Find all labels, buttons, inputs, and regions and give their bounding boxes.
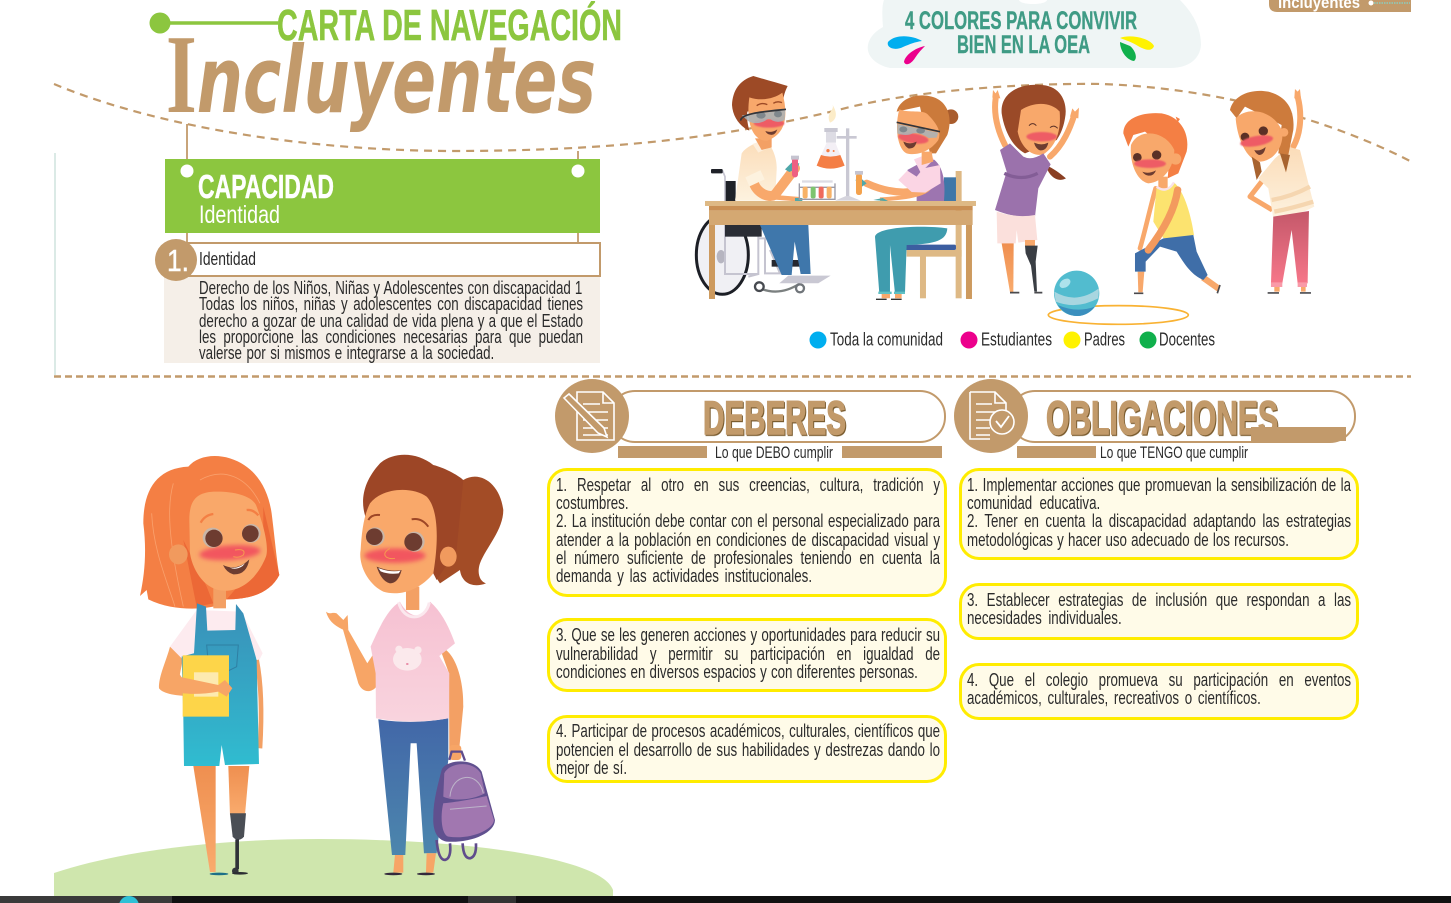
title: Incluyentes: Incluyentes (166, 13, 596, 137)
card: deberes 1 y 2: atender a la población en condiciones de discapacidad visual y (556, 530, 940, 550)
card: obligaciones 1 y 2: comunidad educativa. (967, 493, 1100, 513)
text block: derecho de identidad (199, 278, 583, 363)
deberes subtitle: Lo que DEBO cumplir (715, 443, 833, 462)
number badge (155, 239, 197, 281)
green hill (54, 839, 613, 896)
card: obligaciones 1 y 2: 1. Implementar acciones que promuevan la sensibilización de la (967, 475, 1351, 495)
lab equipment (799, 103, 861, 201)
banner heading: CAPACIDAD (198, 168, 334, 205)
subtitle bars (1017, 427, 1346, 458)
woman (855, 95, 962, 299)
card: obligaciones 4 (959, 663, 1359, 720)
deberes heading: DEBERES (703, 391, 846, 444)
bottom bar (0, 896, 1451, 903)
text block: derecho de identidad: derecho a gozar de una calidad de vida plena y a que el Estado (199, 311, 583, 331)
legend: toda la comunidad (810, 330, 943, 350)
red-haired girl (140, 456, 279, 875)
text block: derecho de identidad: les proporcione las condiciones necesarias para que puedan (199, 327, 583, 347)
card: obligaciones 1 y 2: 2. Tener en cuenta la discapacidad adaptando las estrategias (967, 511, 1351, 531)
icon: document with check (954, 379, 1028, 453)
heading text: CARTA DE NAVEGACIÓN (277, 0, 622, 50)
card: deberes 4: mejor de sí. (556, 758, 627, 778)
legend: toda la comunidad: Toda la comunidad (830, 330, 943, 350)
legend: docentes (1140, 330, 1215, 350)
panel: description background (164, 276, 600, 363)
legend (810, 330, 1215, 350)
tab: incluyentes (1269, 0, 1411, 12)
wheelchair (696, 169, 831, 294)
card: deberes 3 (547, 618, 947, 692)
heading: carta de navegación (150, 0, 622, 50)
card: obligaciones 3: 3. Establecer estrategias de inclusión que respondan a las (967, 590, 1351, 610)
obligaciones heading: OBLIGACIONES (1046, 391, 1278, 444)
icon: petals (888, 36, 1154, 64)
boy (1123, 113, 1220, 293)
text block: derecho de identidad: Todas los niños, niñas y adolescentes con discapacidad tienes (199, 294, 583, 314)
connector line with dot (150, 12, 278, 34)
card: deberes 4: potencien el desarrollo de sus habilidades y destrezas dando lo (556, 740, 940, 760)
number badge: 1. (167, 243, 189, 278)
legend: estudiantes (960, 330, 1052, 350)
row: identidad label: Identidad (199, 249, 256, 269)
card: deberes 1 y 2 (547, 468, 947, 597)
man (732, 76, 811, 275)
left margin rule (54, 153, 56, 375)
card: deberes 1 y 2: costumbres. (556, 493, 629, 513)
backpack (433, 752, 495, 860)
header: obligaciones (954, 379, 1355, 462)
card: obligaciones 3 (959, 583, 1359, 640)
card: deberes 4 (547, 715, 947, 783)
card: deberes 3: vulnerabilidad y permitir su participación en igualdad de (556, 644, 940, 664)
card: deberes 1 y 2: demanda y las actividades institucionales. (556, 566, 812, 586)
dashed curve (54, 84, 1412, 162)
illustration: children playing (992, 85, 1314, 324)
card: obligaciones 3: necesidades individuales. (967, 608, 1122, 628)
panel: capacidad banner (165, 159, 600, 233)
section divider (54, 375, 1411, 378)
card: deberes 1 y 2: el número suficiente de profesionales teniendo en cuenta la (556, 548, 940, 568)
subtitle bars (618, 446, 942, 458)
cloud heading: 4 COLORES PARA CONVIVIR (905, 7, 1137, 35)
card: deberes 4: 4. Participar de procesos académicos, culturales, científicos que (556, 721, 940, 741)
girl with braids (1230, 89, 1314, 293)
ring and ball (1048, 271, 1188, 324)
hanger strings (187, 124, 578, 243)
girl with prosthesis (992, 85, 1079, 293)
illustration: laboratory scene (696, 76, 976, 299)
row: identidad label (187, 243, 600, 276)
legend: estudiantes: Estudiantes (981, 330, 1052, 350)
illustration: two girls talking (140, 455, 503, 875)
card: obligaciones 4: académicos, culturales, recreativos o científicos. (967, 688, 1261, 708)
obligaciones subtitle: Lo que TENGO que cumplir (1100, 443, 1248, 462)
text block: derecho de identidad: Derecho de los Niños, Niñas y Adolescentes con discapacidad 1 (199, 278, 582, 298)
card: deberes 3: condiciones en diversos espacios y con diferentes personas. (556, 662, 918, 682)
legend: docentes: Docentes (1159, 330, 1215, 350)
cloud: 4 colores (868, 0, 1201, 68)
card: deberes 1 y 2: 2. La institución debe contar con el personal especializado para (556, 511, 940, 531)
card: obligaciones 4: 4. Que el colegio promueva su participación en eventos (967, 670, 1351, 690)
text block: derecho de identidad: valerse por si mismos e integrarse a la sociedad. (199, 343, 494, 363)
table (705, 201, 976, 299)
legend: padres: Padres (1084, 330, 1125, 350)
header: deberes (555, 379, 945, 462)
banner subheading: Identidad (199, 201, 280, 229)
brown-haired girl (326, 455, 503, 875)
legend: padres (1064, 330, 1125, 350)
card: deberes 3: 3. Que se les generen acciones y oportunidades para reducir su (556, 625, 940, 645)
shirt bear (393, 646, 422, 671)
card: obligaciones 1 y 2: metodológicas y hacer uso adecuado de los recursos. (967, 530, 1289, 550)
cloud: 4 colores: BIEN EN LA OEA (957, 31, 1090, 59)
card: deberes 1 y 2: 1. Respetar al otro en sus creencias, cultura, tradición y (556, 475, 940, 495)
card: obligaciones 1 y 2 (959, 468, 1359, 560)
icon: document and pencil (555, 379, 629, 453)
